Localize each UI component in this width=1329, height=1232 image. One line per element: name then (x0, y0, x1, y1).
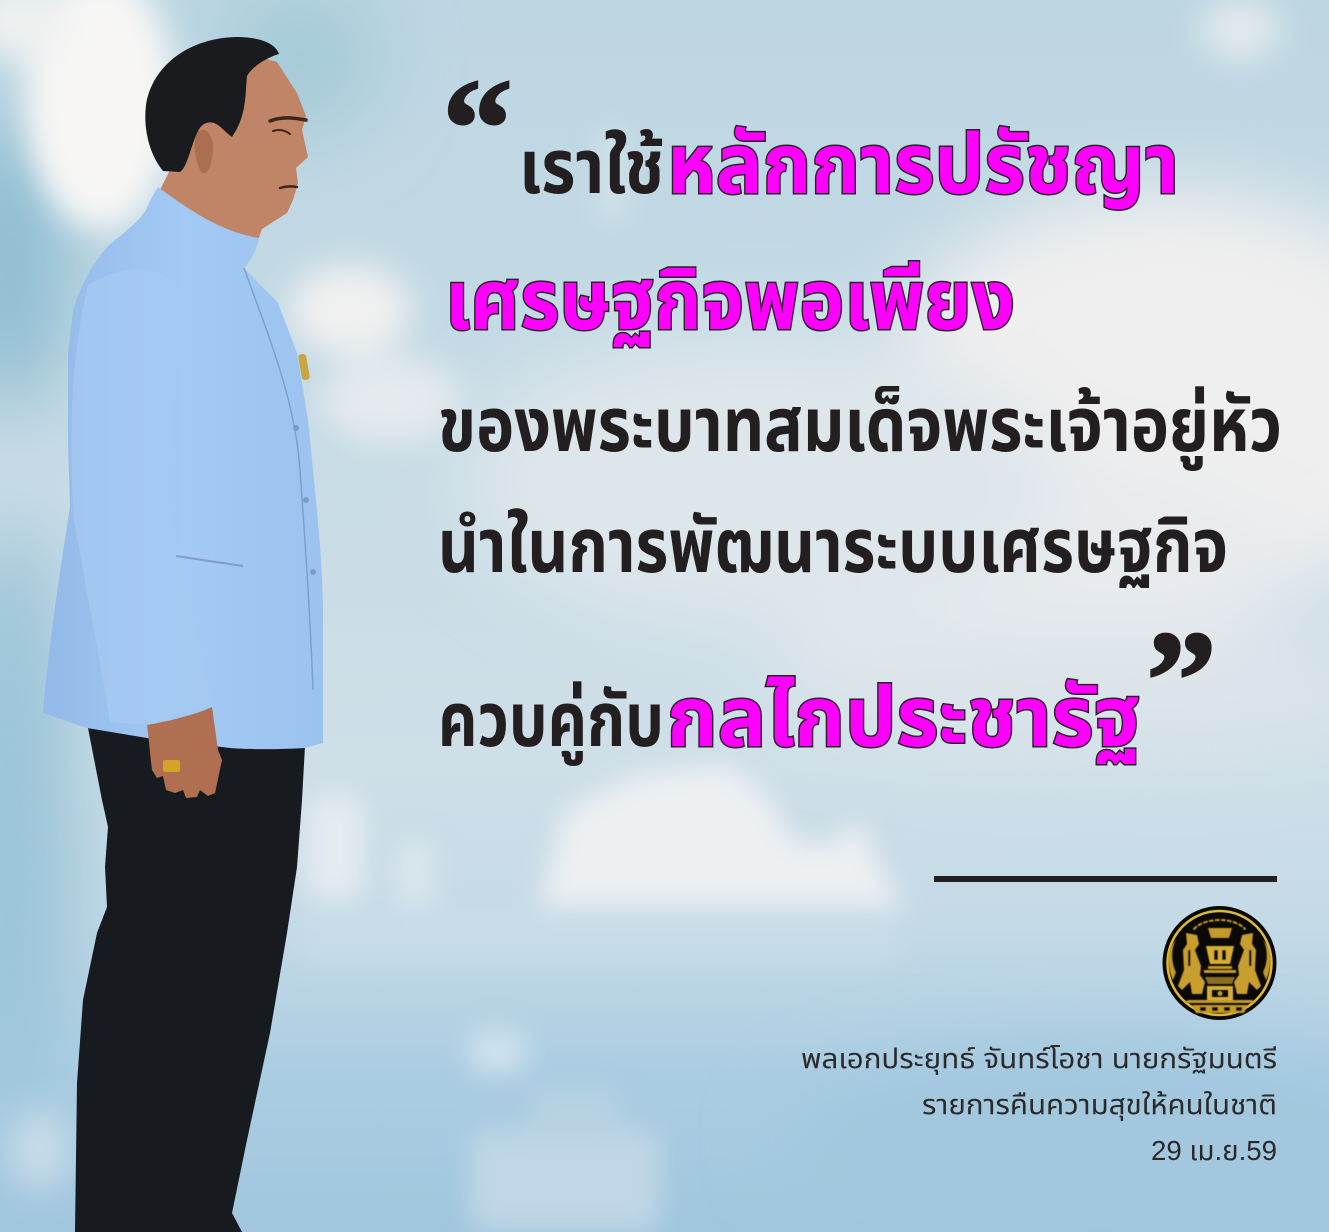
trousers (75, 728, 305, 1232)
quote: line 5 (438, 670, 1140, 766)
facial features (270, 118, 306, 188)
ring (163, 760, 180, 772)
quote: opening mark: “ (442, 49, 513, 207)
hair (145, 37, 279, 172)
attribution text: 29 เม.ย.59 (1151, 1135, 1277, 1166)
base band (1184, 1000, 1256, 1003)
icon: Prime Minister's Office gold seal (1162, 906, 1276, 1020)
badge (298, 354, 310, 380)
pocket (176, 556, 243, 566)
quote: line 2: เศรษฐกิจพอเพียง (445, 253, 1015, 347)
ear (195, 130, 213, 173)
neck and face (160, 58, 308, 246)
attribution text (801, 1043, 1277, 1166)
quote: line 5: กลไกประชารัฐ (667, 670, 1140, 764)
central vessel (1208, 928, 1232, 938)
jacket (43, 187, 323, 749)
quote: line 1: หลักการปรัชญา (667, 117, 1179, 211)
sleeve shading and arm (71, 269, 212, 725)
quote: line 1: เราใช้ (519, 125, 664, 210)
quote: closing mark: ” (1146, 601, 1217, 759)
front placket line (244, 268, 313, 690)
attribution text: พลเอกประยุทธ์ จันทร์โอชา นายกรัฐมนตรี (801, 1043, 1277, 1075)
hand (147, 707, 222, 798)
buttons (293, 425, 316, 575)
quote: line 5: ควบคู่กับ (438, 678, 664, 766)
divider rule (934, 876, 1277, 882)
right lion guardian (1234, 933, 1261, 994)
attribution text: รายการคืนความสุขให้คนในชาติ (922, 1089, 1277, 1121)
radiating crown marks (1194, 920, 1245, 929)
person: standing man in light-blue jacket (43, 37, 323, 1232)
left lion guardian (1178, 933, 1205, 994)
pedestal (1207, 986, 1233, 1000)
